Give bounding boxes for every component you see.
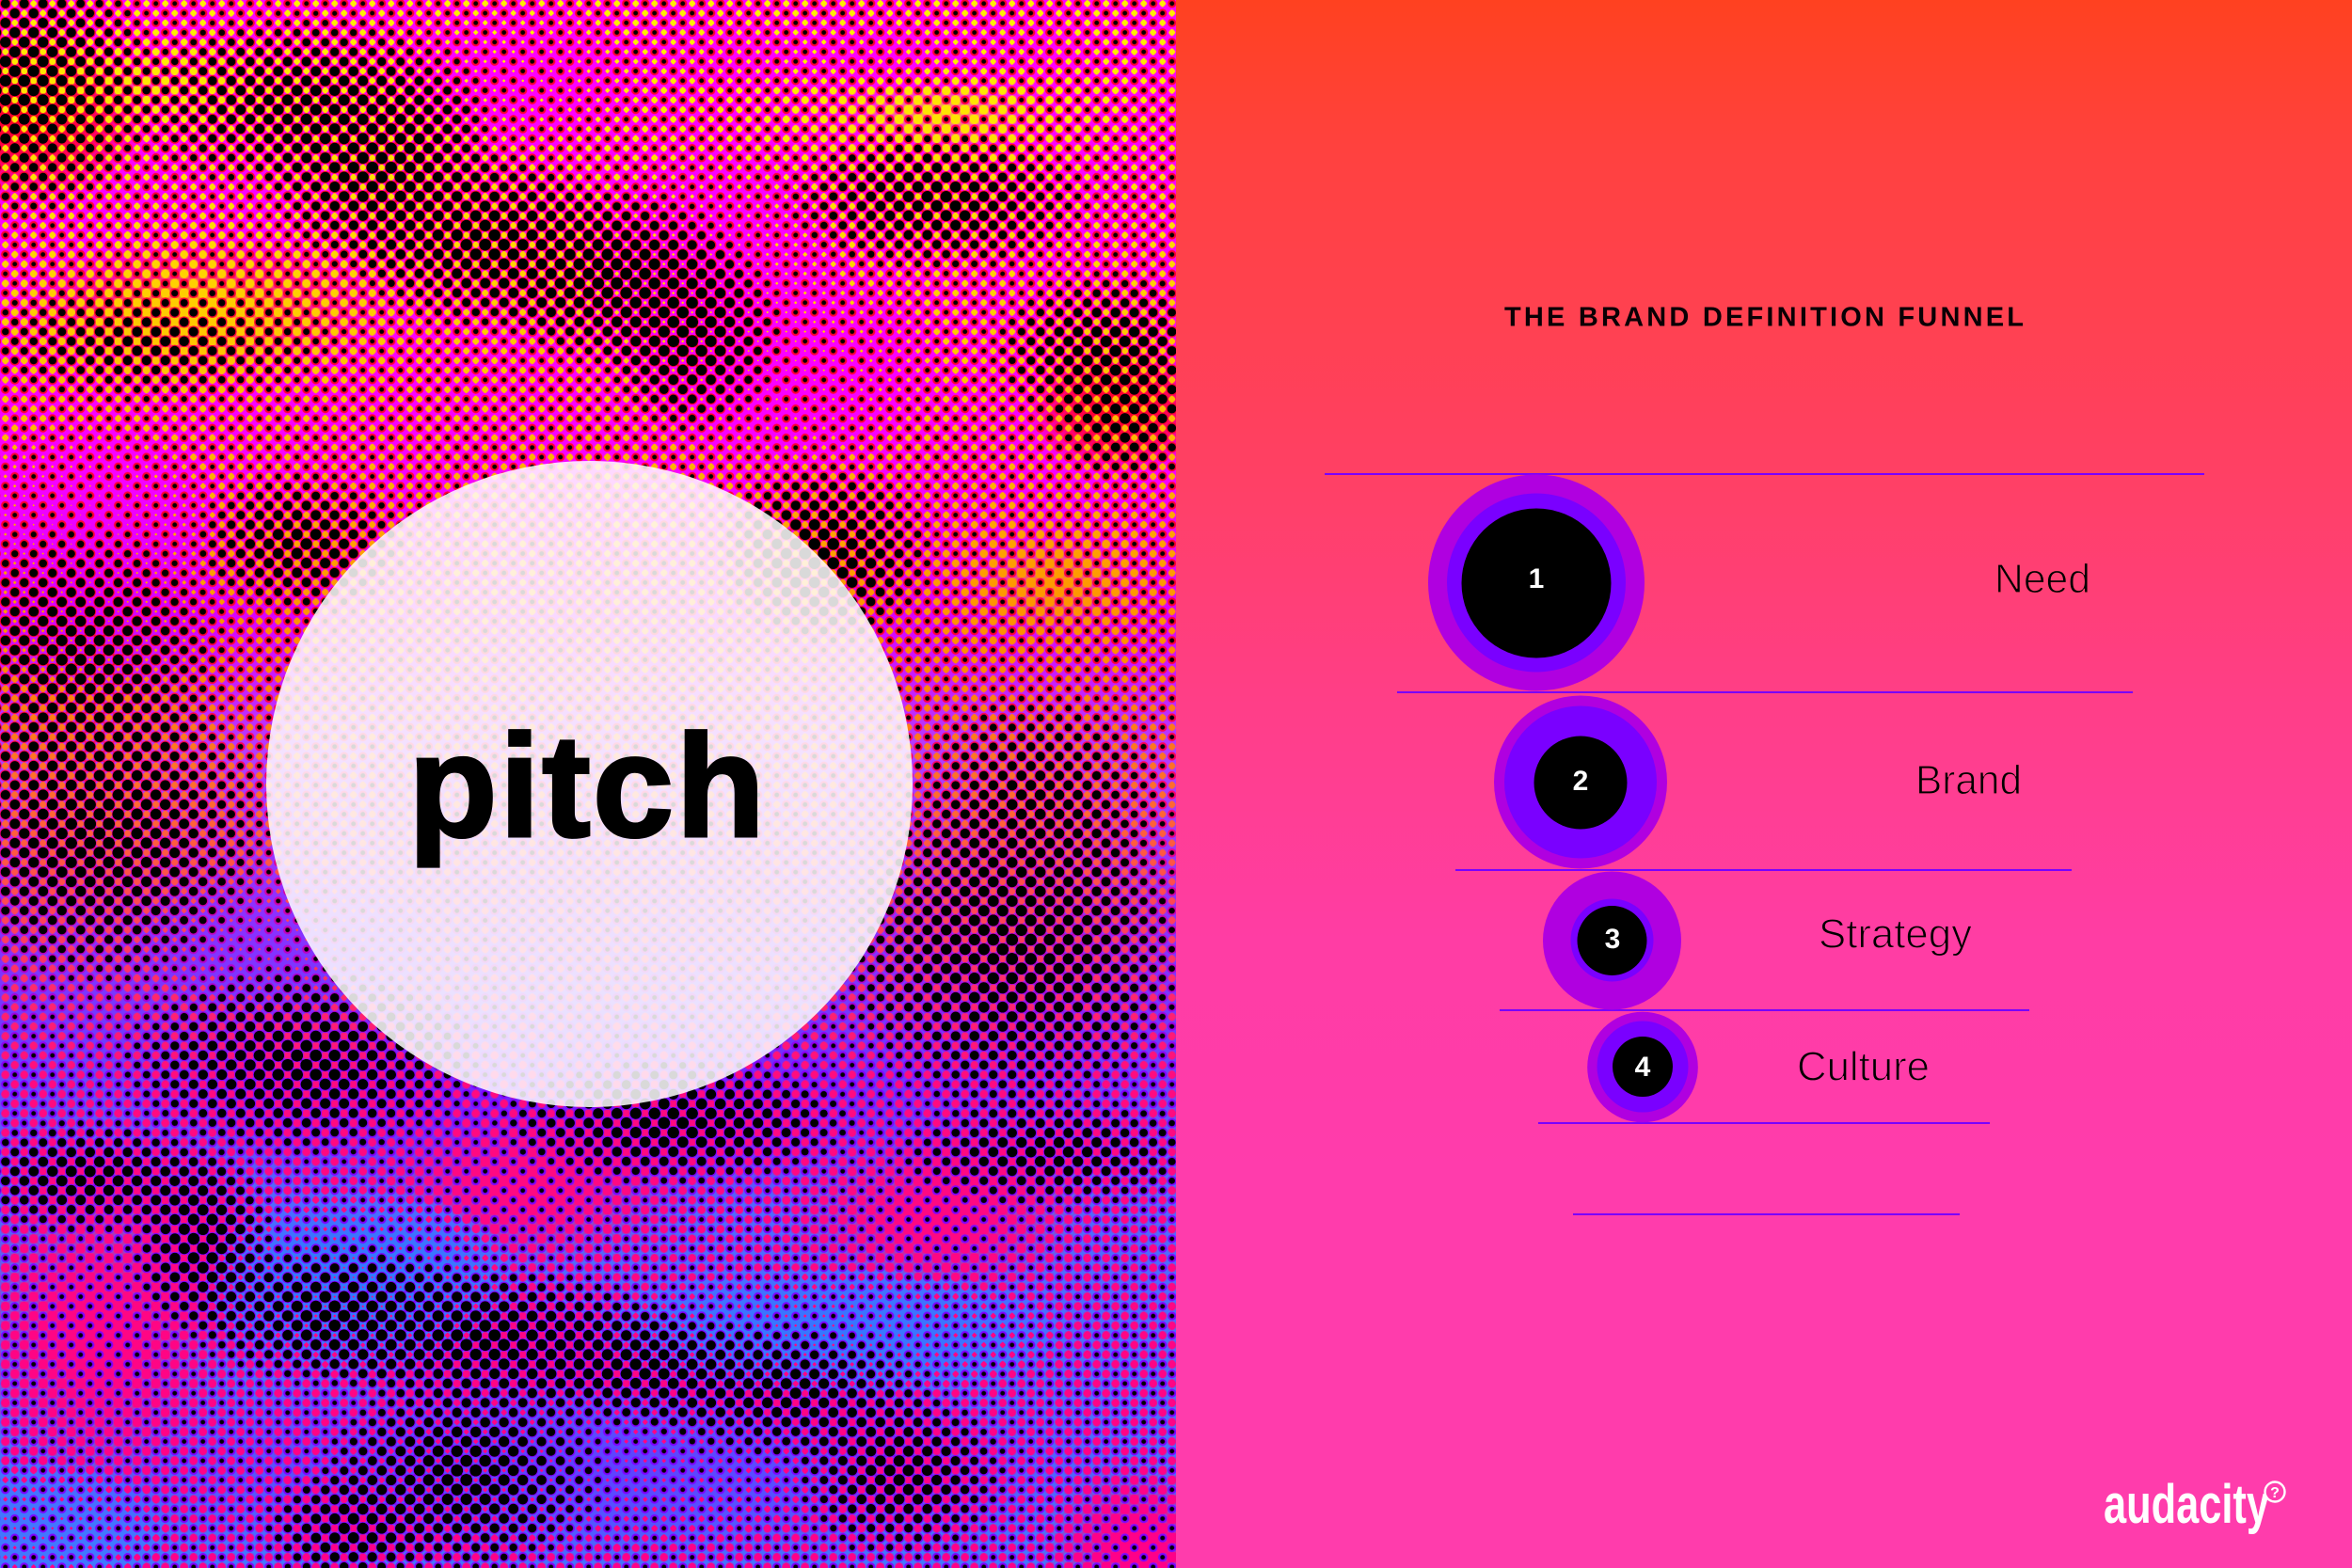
funnel chart [1325,474,2204,1214]
funnel step 2: brand: 2 [1573,766,1588,797]
title: the brand definition funnel: THE BRAND DEFINITION FUNNEL [1504,303,2024,333]
funnel step 4: culture [1587,1012,1930,1122]
funnel step 3: strategy: Strategy [1819,911,1972,958]
funnel step 1: need: Need [1994,556,2090,602]
logo: audacity: ? [2270,1485,2280,1501]
panel: right gradient background [1176,0,2352,1568]
halftone corner squares [0,0,1176,1568]
funnel step 1: need: 1 [1529,563,1544,594]
halftone inner dot rings [0,0,1176,1568]
logo: audacity: audacity [2104,1474,2269,1535]
halftone base ring colour [0,0,1214,1568]
funnel step 2: brand [1494,696,2022,869]
panel: left halftone artwork [0,0,1214,1568]
funnel step 3: strategy: 3 [1605,924,1620,955]
funnel step 3: strategy [1543,871,1972,1010]
funnel step 4: culture: Culture [1797,1044,1930,1089]
funnel step 4: culture: 4 [1635,1052,1651,1083]
heading: pitch: pitch [408,705,767,867]
halftone black dots [0,0,1176,1568]
funnel step 2: brand: Brand [1915,757,2022,803]
circle: translucent white disc [266,461,913,1107]
funnel step 1: need [1428,474,2090,690]
